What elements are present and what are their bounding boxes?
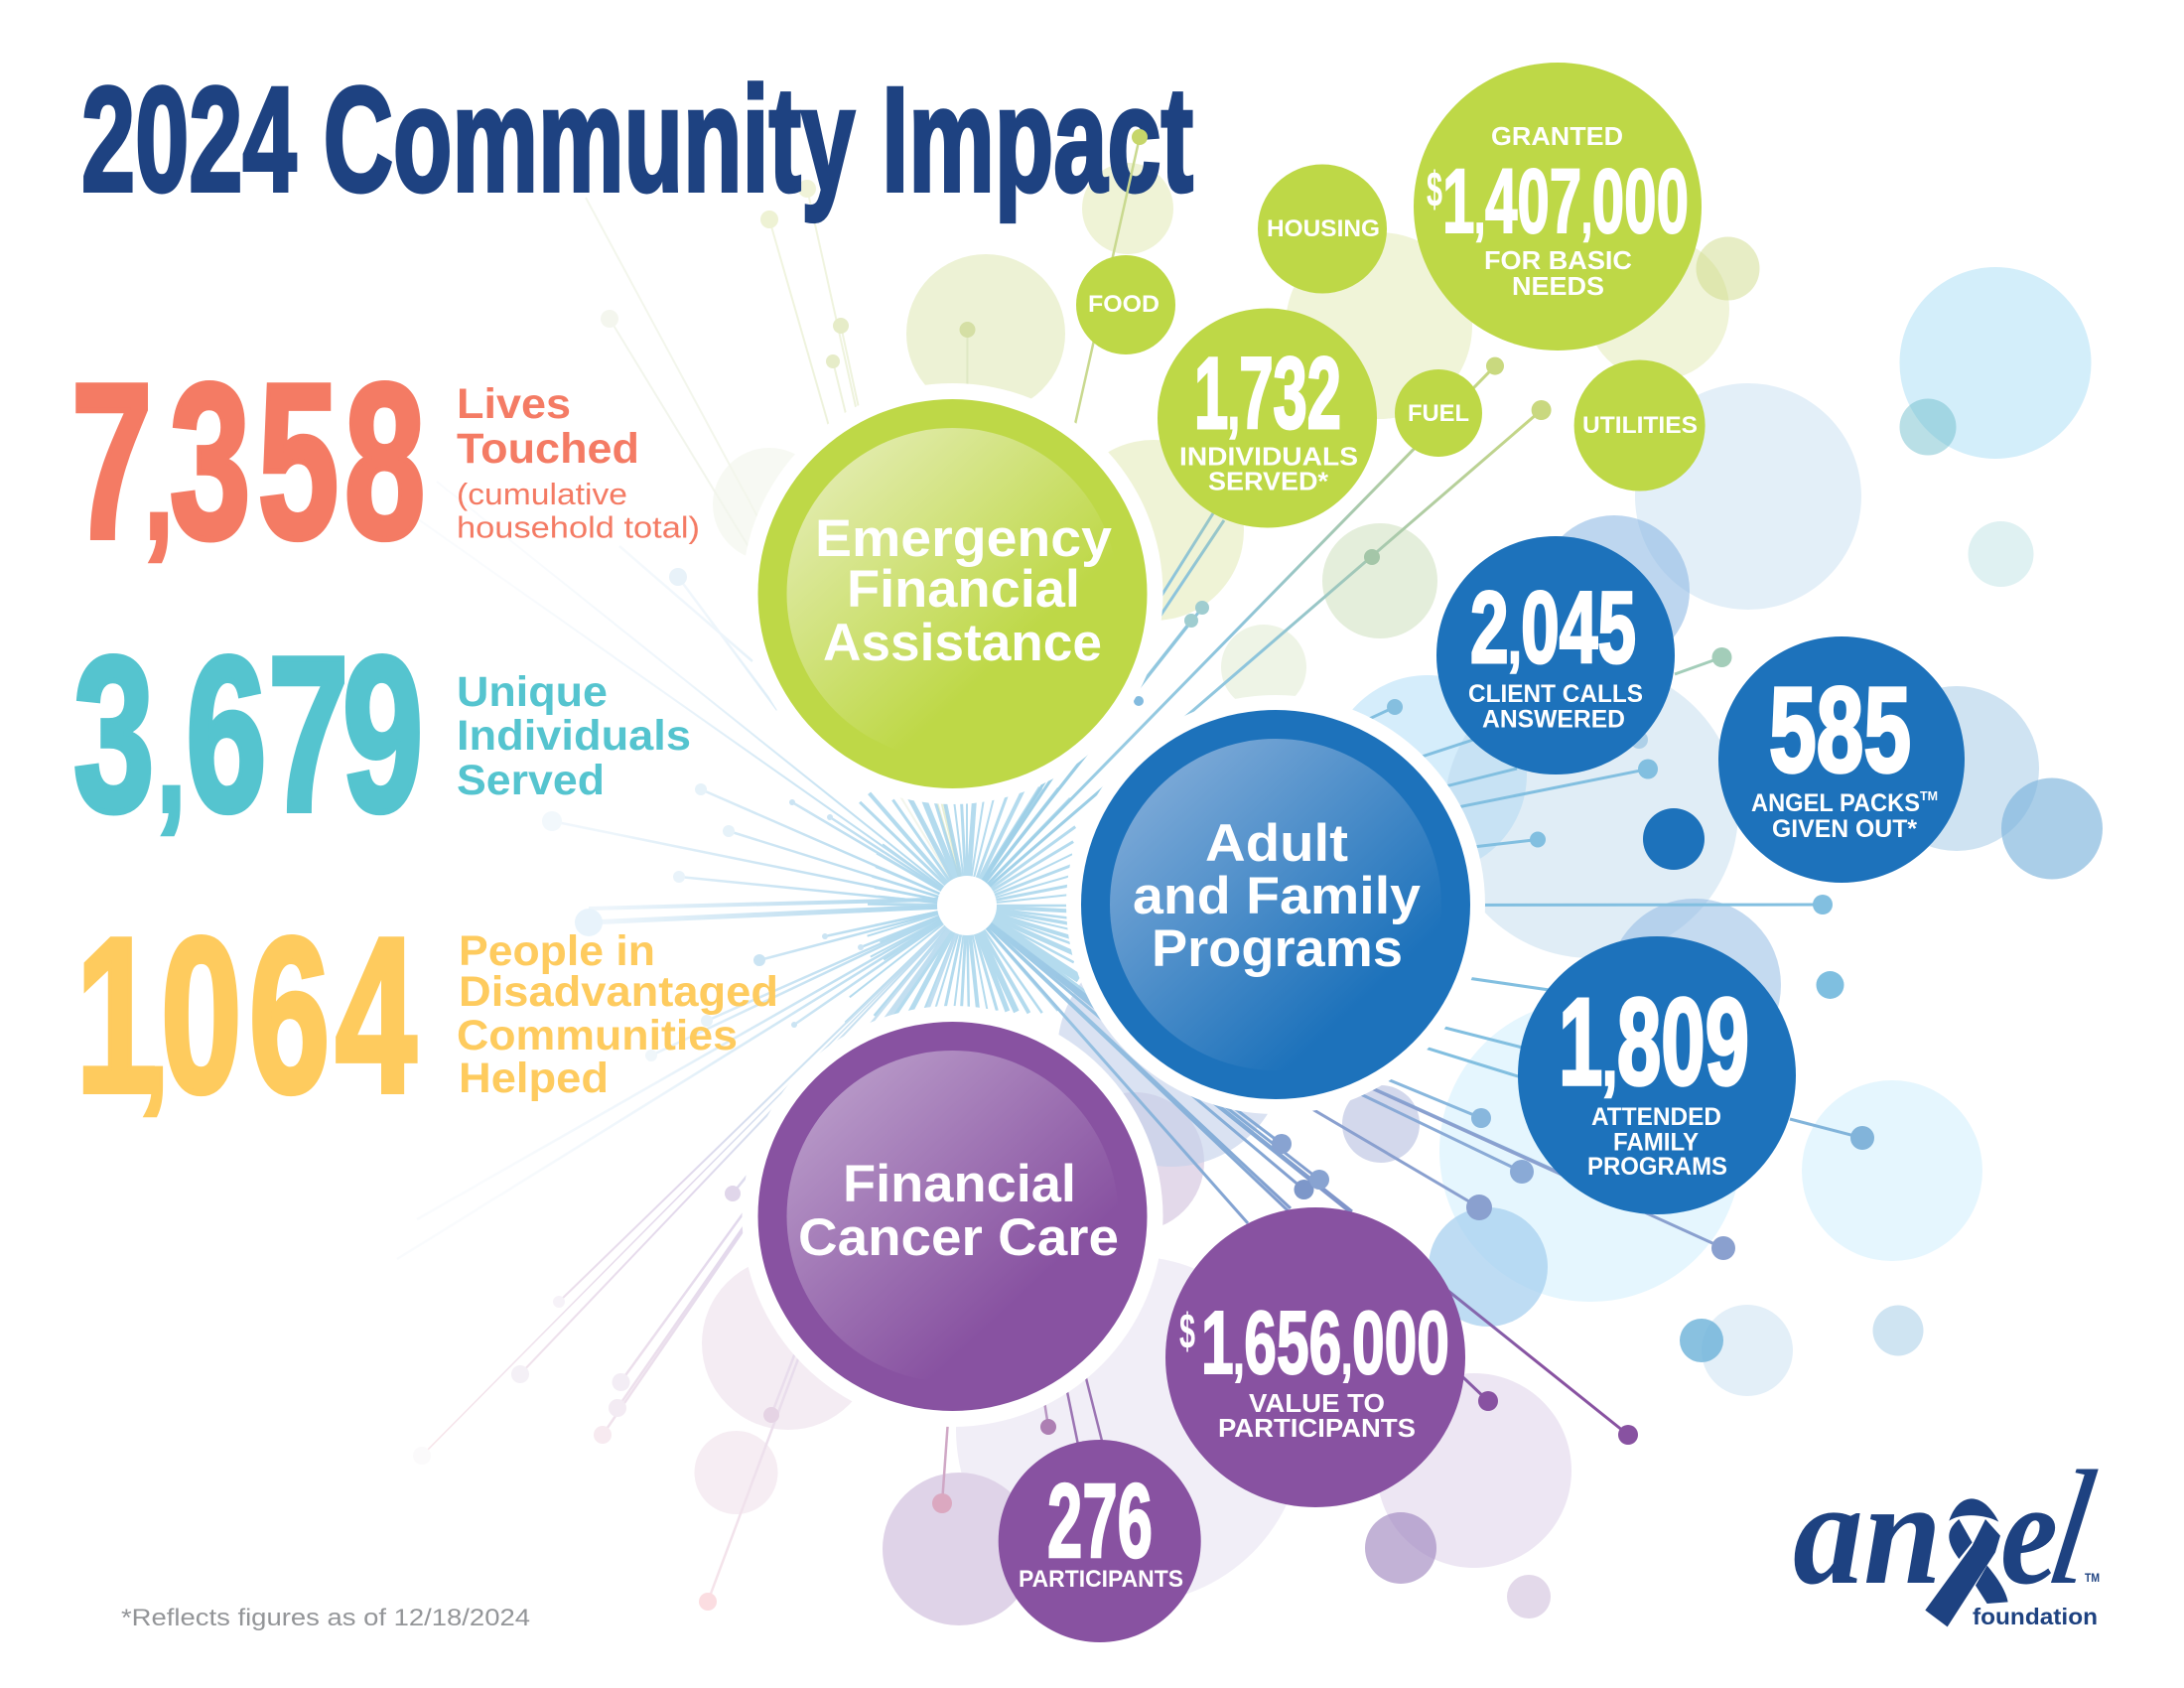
stat: lives touched: 3 (170, 338, 250, 584)
panel: Adult and Family Programs: Adult (1205, 814, 1348, 873)
stat: value to participants: VALUE TO (1249, 1388, 1385, 1418)
stat: lives touched: Lives (457, 380, 571, 428)
stat: people in disadvantaged communities: Communities (457, 1012, 738, 1059)
panel: Financial Cancer Care: Cancer Care (798, 1208, 1119, 1267)
stat: value to participants: 1,656,000 (1201, 1294, 1449, 1393)
stat: unique individuals served: 6 (186, 611, 267, 857)
stat: food (1076, 255, 1175, 354)
stat: lives touched: 8 (344, 338, 425, 584)
stat: lives touched: Touched (457, 425, 639, 473)
stat: unique individuals served: 9 (342, 611, 423, 857)
stat: unique individuals served: , (158, 675, 185, 842)
stat: attended family programs (1518, 936, 1796, 1214)
stat: value to participants: PARTICIPANTS (1218, 1413, 1416, 1443)
stat: individuals served: INDIVIDUALS (1179, 442, 1358, 472)
connector dots: lower left purple (413, 1186, 1056, 1611)
stat: individuals served (1158, 308, 1377, 528)
connector lines: lower left purple (422, 906, 1103, 1602)
stat: lives touched: household total) (457, 510, 700, 544)
stat: value to participants (1165, 1207, 1465, 1507)
stat: attended family programs: FAMILY (1613, 1128, 1699, 1156)
stat: people in disadvantaged communities: Helped (459, 1055, 609, 1102)
connector dots: top (601, 180, 975, 368)
footnote: *Reflects figures as of 12/18/2024 (121, 1605, 530, 1631)
stat: client calls answered (1436, 536, 1675, 774)
stat: participants: 276 (1047, 1463, 1153, 1580)
panel: Adult and Family Programs (1081, 710, 1470, 1099)
stat: attended family programs: 1,809 (1559, 974, 1749, 1111)
connector lines: top (586, 189, 967, 906)
stat: angel packs (1718, 636, 1965, 883)
stat: housing (1258, 165, 1387, 294)
stat: unique individuals served: 7 (268, 611, 348, 857)
stat: people in disadvantaged communities: 6 (249, 892, 330, 1138)
stat: client calls answered: CLIENT CALLS (1468, 680, 1643, 708)
stat: angel packs: 585 (1769, 662, 1911, 797)
panel: Financial Cancer Care: Financial (843, 1155, 1076, 1213)
stat: people in disadvantaged communities: , (140, 956, 168, 1123)
stat: attended family programs: PROGRAMS (1587, 1153, 1727, 1181)
panel: Emergency Financial Assistance: Emergency (815, 509, 1113, 568)
stat: value to participants: $ (1179, 1304, 1195, 1359)
stat: participants: PARTICIPANTS (1019, 1566, 1183, 1593)
stat: people in disadvantaged communities: 1 (76, 892, 157, 1138)
connector dots: lower right (1272, 1108, 1874, 1445)
stat: people in disadvantaged communities: 0 (161, 892, 242, 1138)
stat: granted for basic needs: GRANTED (1491, 121, 1623, 151)
white rings (743, 383, 1485, 1427)
panel: Financial Cancer Care (758, 1022, 1148, 1411)
panel: Emergency Financial Assistance: Assistance (823, 614, 1102, 672)
stat: granted for basic needs: $ (1427, 162, 1442, 217)
stat: angel packs: GIVEN OUT* (1772, 815, 1917, 843)
stat: client calls answered: ANSWERED (1482, 706, 1625, 734)
stat: people in disadvantaged communities: People in (459, 927, 655, 975)
stat: unique individuals served: 3 (73, 611, 155, 857)
stat: housing: HOUSING (1267, 215, 1380, 242)
logo: anxel foundation: TM (2085, 1571, 2100, 1585)
stat: fuel (1395, 369, 1482, 457)
panel: Emergency Financial Assistance: Financial (847, 560, 1080, 619)
connector dots: right blue (1387, 647, 1833, 914)
stat: utilities: UTILITIES (1582, 412, 1698, 439)
stat: individuals served: SERVED* (1208, 467, 1329, 496)
icon: awareness ribbon (1925, 1498, 2008, 1626)
connector: food dot over title (1053, 129, 1148, 521)
stat: granted for basic needs: FOR BASIC (1484, 245, 1632, 275)
stat: lives touched: 5 (258, 338, 339, 584)
connector dots: left fade (542, 568, 864, 1061)
stat: angel packs: TM (1920, 788, 1938, 803)
logo: anxel foundation: l (2038, 1437, 2107, 1618)
background bubbles (695, 163, 2103, 1625)
stat: people in disadvantaged communities (76, 892, 778, 1138)
stat: unique individuals served: Served (457, 757, 605, 804)
stat: unique individuals served (73, 611, 691, 857)
stat: granted for basic needs: NEEDS (1512, 271, 1604, 301)
stat: angel packs: ANGEL PACKS (1751, 789, 1920, 817)
connector lines: left fade (397, 482, 967, 1259)
stat: lives touched (71, 338, 700, 584)
starburst rays (846, 785, 1086, 1023)
stat: people in disadvantaged communities: 4 (336, 892, 416, 1138)
stat: granted for basic needs: 1,407,000 (1442, 151, 1689, 252)
stat: granted for basic needs (1414, 63, 1702, 351)
connector lines: upper right (967, 366, 1542, 906)
panel: Emergency Financial Assistance (758, 399, 1148, 788)
stat: people in disadvantaged communities: Disadvantaged (459, 968, 778, 1016)
stat: food: FOOD (1088, 291, 1160, 318)
stat: lives touched: 7 (71, 338, 152, 584)
logo: anxel foundation: foundation (1973, 1604, 2098, 1629)
logo: anxel foundation (1793, 1437, 2107, 1629)
logo: anxel foundation: an (1793, 1451, 1942, 1616)
stat: unique individuals served: Individuals (457, 712, 691, 760)
connector dots: upper right (1134, 357, 1552, 706)
stat: individuals served: 1,732 (1194, 337, 1341, 450)
stat: fuel: FUEL (1408, 400, 1469, 427)
connector lines: lower right (967, 906, 1862, 1435)
stat: client calls answered: 2,045 (1470, 571, 1636, 684)
panel: Adult and Family Programs: and Family (1133, 867, 1422, 925)
hub (937, 876, 997, 935)
panel: Adult and Family Programs: Programs (1152, 919, 1403, 978)
stat: attended family programs: ATTENDED (1591, 1103, 1721, 1131)
stat: lives touched: , (145, 402, 173, 569)
stat: participants (999, 1440, 1201, 1642)
stat: utilities (1574, 359, 1706, 491)
stat: unique individuals served: Unique (457, 668, 608, 716)
stat: lives touched: (cumulative (457, 477, 627, 511)
logo: anxel foundation: e (2000, 1451, 2058, 1616)
title: 2024 Community Impact (81, 56, 1193, 222)
connector lines: right blue (1092, 657, 1823, 906)
